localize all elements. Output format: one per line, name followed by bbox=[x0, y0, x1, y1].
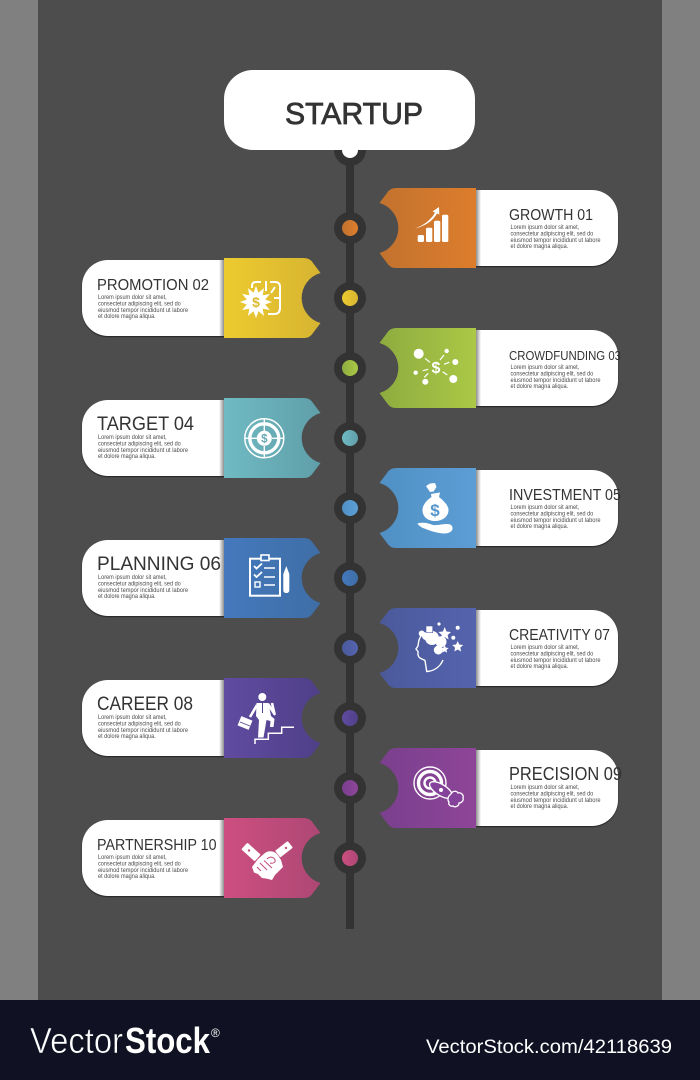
ticket bbox=[380, 468, 476, 548]
body text: Lorem ipsum dolor sit amet, bbox=[510, 644, 579, 651]
icon: growth chart bbox=[415, 207, 448, 242]
card bbox=[476, 470, 618, 546]
body text: et dolore magna aliqua. bbox=[510, 523, 568, 530]
heading: CREATIVITY 07 bbox=[509, 627, 610, 644]
card bbox=[476, 330, 618, 406]
icon: handshake bbox=[241, 841, 293, 880]
node 09 bbox=[334, 772, 366, 804]
logo wordmark: Stock bbox=[125, 1020, 211, 1061]
node 03 bbox=[334, 352, 366, 384]
ticket bbox=[224, 818, 320, 898]
logo wordmark: ® bbox=[211, 1026, 220, 1040]
icon: businessman climbing stairs bbox=[238, 693, 294, 744]
node 01 bbox=[334, 212, 366, 244]
body text bbox=[98, 854, 188, 880]
node 08 bbox=[334, 702, 366, 734]
heading: PARTNERSHIP 10 bbox=[97, 837, 217, 854]
start node bbox=[334, 134, 366, 166]
body text: consectetur adipiscing elit, sed do bbox=[510, 790, 593, 797]
body text bbox=[98, 294, 188, 320]
ticket bbox=[224, 398, 320, 478]
heading: CROWDFUNDING 03 bbox=[509, 348, 621, 363]
icon: rocket and target bbox=[414, 767, 463, 807]
body text bbox=[510, 644, 601, 670]
node 02 bbox=[334, 282, 366, 314]
body text: eiusmod tempor incididunt ut labore bbox=[98, 307, 188, 314]
icon: money bag on hand: $ bbox=[430, 501, 440, 520]
body text bbox=[510, 364, 601, 390]
body text: et dolore magna aliqua. bbox=[510, 803, 568, 810]
body text: consectetur adipiscing elit, sed do bbox=[98, 440, 181, 447]
card bbox=[82, 260, 224, 336]
heading: PRECISION 09 bbox=[509, 763, 622, 784]
panel: crowdfunding 03 bbox=[380, 328, 621, 408]
footer bar bbox=[0, 1000, 700, 1080]
card bbox=[476, 610, 618, 686]
body text: Lorem ipsum dolor sit amet, bbox=[510, 504, 579, 511]
timeline with nodes bbox=[334, 134, 366, 929]
panel: career 08 bbox=[82, 678, 320, 758]
body text: consectetur adipiscing elit, sed do bbox=[510, 650, 593, 657]
title: STARTUP bbox=[285, 96, 423, 131]
body text: et dolore magna aliqua. bbox=[98, 453, 156, 460]
ticket bbox=[380, 328, 476, 408]
body text: et dolore magna aliqua. bbox=[510, 383, 568, 390]
body text: consectetur adipiscing elit, sed do bbox=[98, 300, 181, 307]
body text: et dolore magna aliqua. bbox=[510, 663, 568, 670]
body text: Lorem ipsum dolor sit amet, bbox=[510, 224, 579, 231]
body text: eiusmod tempor incididunt ut labore bbox=[510, 517, 601, 524]
body text bbox=[98, 574, 188, 600]
ticket bbox=[224, 258, 320, 338]
heading: INVESTMENT 05 bbox=[509, 487, 621, 504]
icon: clipboard checklist bbox=[250, 555, 289, 596]
body text: consectetur adipiscing elit, sed do bbox=[510, 370, 593, 377]
ticket bbox=[224, 678, 320, 758]
heading: CAREER 08 bbox=[97, 693, 193, 715]
panel: investment 05 bbox=[380, 468, 621, 548]
card bbox=[82, 540, 224, 616]
body text: Lorem ipsum dolor sit amet, bbox=[98, 574, 167, 581]
icon: money bag on hand bbox=[418, 483, 453, 534]
ticket bbox=[224, 538, 320, 618]
body text bbox=[98, 434, 188, 460]
node 10 bbox=[334, 842, 366, 874]
icon: promotion burst: $ bbox=[252, 294, 260, 310]
body text: eiusmod tempor incididunt ut labore bbox=[98, 447, 188, 454]
body text: consectetur adipiscing elit, sed do bbox=[98, 720, 181, 727]
title box bbox=[224, 70, 475, 150]
panel: creativity 07 bbox=[380, 608, 618, 688]
body text: et dolore magna aliqua. bbox=[98, 733, 156, 740]
body text: consectetur adipiscing elit, sed do bbox=[98, 580, 181, 587]
ticket bbox=[380, 608, 476, 688]
body text: et dolore magna aliqua. bbox=[98, 313, 156, 320]
image id url: VectorStock.com/42118639 bbox=[426, 1036, 672, 1058]
card bbox=[476, 750, 618, 826]
panel: planning 06 bbox=[82, 538, 320, 618]
panel: target 04 bbox=[82, 398, 320, 478]
panel: precision 09 bbox=[380, 748, 622, 828]
body text: consectetur adipiscing elit, sed do bbox=[510, 510, 593, 517]
body text: consectetur adipiscing elit, sed do bbox=[98, 860, 181, 867]
icon: creative head bbox=[416, 622, 463, 672]
timeline stem bbox=[346, 150, 354, 929]
node 06 bbox=[334, 562, 366, 594]
body text: et dolore magna aliqua. bbox=[98, 873, 156, 880]
icon: target: $ bbox=[261, 434, 268, 446]
body text bbox=[98, 714, 188, 740]
heading: PROMOTION 02 bbox=[97, 277, 209, 294]
node 05 bbox=[334, 492, 366, 524]
ticket bbox=[380, 748, 476, 828]
panel: growth 01 bbox=[380, 188, 618, 268]
body text bbox=[510, 224, 601, 250]
icon: crowdfunding network bbox=[414, 349, 458, 385]
body text: eiusmod tempor incididunt ut labore bbox=[510, 797, 601, 804]
body text: eiusmod tempor incididunt ut labore bbox=[98, 587, 188, 594]
body text: eiusmod tempor incididunt ut labore bbox=[98, 727, 188, 734]
body text: Lorem ipsum dolor sit amet, bbox=[98, 854, 167, 861]
heading: PLANNING 06 bbox=[97, 553, 221, 575]
panel: promotion 02 bbox=[82, 258, 320, 338]
body text: consectetur adipiscing elit, sed do bbox=[510, 230, 593, 237]
node 07 bbox=[334, 632, 366, 664]
body text: eiusmod tempor incididunt ut labore bbox=[510, 237, 601, 244]
icon: promotion burst bbox=[240, 281, 280, 318]
body text: Lorem ipsum dolor sit amet, bbox=[98, 294, 167, 301]
logo wordmark bbox=[30, 1020, 220, 1061]
body text: et dolore magna aliqua. bbox=[98, 593, 156, 600]
body text: et dolore magna aliqua. bbox=[510, 243, 568, 250]
card bbox=[82, 400, 224, 476]
body text: Lorem ipsum dolor sit amet, bbox=[98, 434, 167, 441]
icon: crowdfunding network: $ bbox=[432, 360, 441, 377]
card bbox=[82, 680, 224, 756]
body text bbox=[510, 784, 601, 810]
node 04 bbox=[334, 422, 366, 454]
heading: TARGET 04 bbox=[97, 413, 194, 435]
ticket bbox=[380, 188, 476, 268]
panel: partnership 10 bbox=[82, 818, 320, 898]
card bbox=[82, 820, 224, 896]
card bbox=[476, 190, 618, 266]
body text: eiusmod tempor incididunt ut labore bbox=[510, 377, 601, 384]
body text: Lorem ipsum dolor sit amet, bbox=[98, 714, 167, 721]
body text bbox=[510, 504, 601, 530]
body text: Lorem ipsum dolor sit amet, bbox=[510, 364, 579, 371]
logo wordmark: Vector bbox=[30, 1020, 123, 1061]
heading: GROWTH 01 bbox=[509, 207, 593, 224]
body text: Lorem ipsum dolor sit amet, bbox=[510, 784, 579, 791]
icon: target bbox=[245, 419, 284, 458]
body text: eiusmod tempor incididunt ut labore bbox=[98, 867, 188, 874]
body text: eiusmod tempor incididunt ut labore bbox=[510, 657, 601, 664]
